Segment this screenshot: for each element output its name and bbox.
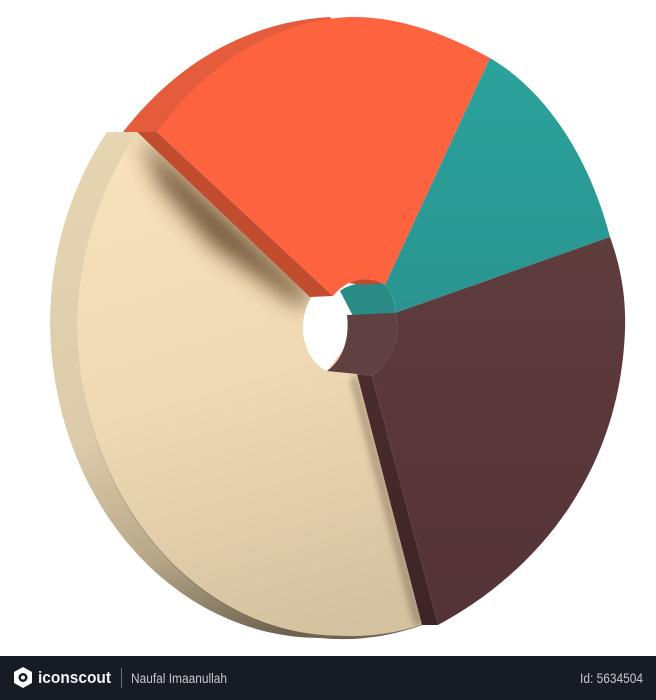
footer bar xyxy=(0,656,656,700)
red slice top wall xyxy=(123,17,350,132)
brown slice front face xyxy=(372,237,625,625)
red slice front face xyxy=(157,17,490,296)
beige rim line xyxy=(77,320,422,636)
author name: Naufal Imaanullah xyxy=(131,671,227,686)
asset id: Id: 5634504 xyxy=(580,671,643,686)
beige slice front face xyxy=(77,133,422,636)
beige slice side wall xyxy=(50,132,422,639)
brown hole wall xyxy=(327,313,397,376)
teal slice front face xyxy=(382,58,610,313)
icon: iconscout logo xyxy=(14,667,32,688)
pie chart xyxy=(50,17,625,639)
centre hole xyxy=(303,296,350,371)
red slice side wall xyxy=(137,132,333,297)
beige slice soft shadows xyxy=(140,135,424,625)
brand name: iconscout xyxy=(38,669,111,687)
red notch wall xyxy=(349,279,382,284)
teal hole wall xyxy=(340,282,395,316)
brown slice side wall xyxy=(357,374,438,625)
